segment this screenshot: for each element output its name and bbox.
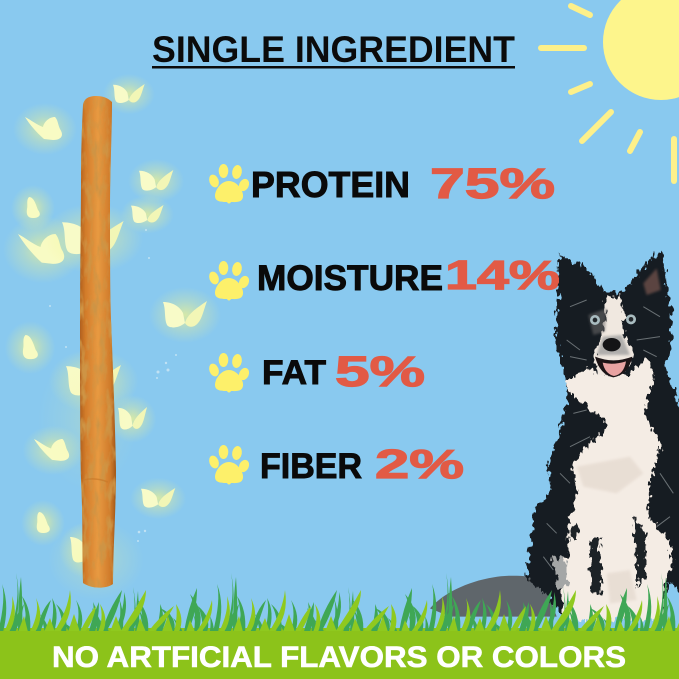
illustration: border collie dog <box>430 250 679 620</box>
row: fat 5%: 5% <box>335 348 425 396</box>
row: fiber 2%: 2% <box>375 441 464 487</box>
row: protein 75%: 75% <box>430 160 555 208</box>
row: fiber 2%: FIBER <box>260 447 362 486</box>
row: protein 75%: PROTEIN <box>251 164 410 205</box>
icon: sun <box>541 0 679 181</box>
icon: paw <box>207 445 251 484</box>
row: protein 75% <box>207 160 555 208</box>
bully stick <box>80 96 116 588</box>
footer text: NO ARTFICIAL FLAVORS OR COLORS <box>52 641 626 674</box>
row: fat 5%: FAT <box>262 354 326 392</box>
butterflies with glow <box>3 74 221 600</box>
grass and green ground band <box>0 573 679 679</box>
row: moisture 14%: 14% <box>445 252 560 298</box>
heading: single ingredient: SINGLE INGREDIENT <box>152 29 515 70</box>
row: moisture 14%: MOISTURE <box>257 259 443 298</box>
row: fiber 2% <box>207 441 464 487</box>
icon: paw <box>207 261 251 300</box>
row: moisture 14% <box>207 252 560 300</box>
icon: paw <box>207 164 251 204</box>
icon: paw <box>207 353 251 392</box>
row: fat 5% <box>207 348 425 396</box>
